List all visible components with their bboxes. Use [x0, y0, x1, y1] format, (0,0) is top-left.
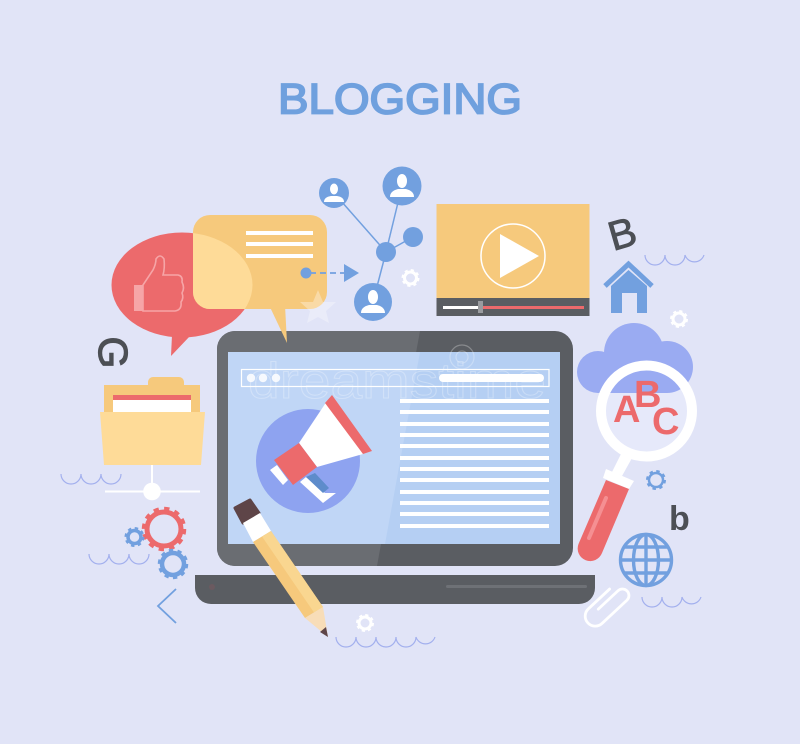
watermark: dreamstime: [248, 353, 546, 409]
letters ABC: [613, 374, 679, 443]
waves lower left: [89, 554, 149, 564]
title: BLOGGING: [278, 76, 522, 124]
megaphone: [256, 395, 372, 513]
icon: red gear: [144, 509, 184, 549]
laptop: [195, 331, 595, 604]
infographic: blogging: [60, 82, 704, 648]
icon: user node left: [319, 178, 349, 208]
letters ABC: A: [613, 389, 640, 431]
laptop screen: [228, 352, 560, 544]
icon: user node bottom: [354, 283, 392, 321]
icon: blue gear right: [647, 471, 665, 489]
network diagram: [319, 166, 423, 321]
folder connector: [105, 465, 200, 500]
icon: white gear top: [402, 270, 418, 286]
icon: blue gear: [160, 550, 186, 578]
text lines: [400, 399, 549, 528]
letter G: G: [90, 337, 136, 368]
progress slider: [443, 301, 584, 313]
letter B: B: [603, 208, 642, 260]
waves bottom right: [642, 597, 701, 607]
bubble text lines: [246, 231, 313, 258]
play button: [481, 224, 545, 288]
letter b: b: [669, 500, 690, 538]
letters ABC: C: [652, 401, 679, 443]
icon: small blue gear: [126, 528, 143, 546]
laptop base: [195, 575, 595, 604]
waves left: [61, 474, 121, 484]
magnifier ring: [601, 366, 692, 456]
waves top right: [645, 255, 704, 265]
icon: paper clip: [581, 581, 632, 630]
icon: star: [300, 290, 336, 323]
folder: [100, 377, 205, 465]
icon: white gear bottom: [357, 615, 373, 631]
icon: chevron: [158, 589, 176, 623]
laptop lid: [217, 331, 573, 566]
icon: cloud: [577, 323, 693, 393]
magnifier: [578, 366, 692, 561]
dashed arrow: [300, 264, 359, 282]
pencil: [235, 500, 328, 637]
browser bar: [242, 370, 549, 386]
magnifier lens background: [600, 365, 692, 457]
video player: [436, 204, 590, 316]
waves bottom centre: [336, 637, 435, 647]
red speech bubble: [112, 232, 252, 356]
icon: white gear right: [671, 311, 687, 327]
magnifier handle: [578, 480, 629, 561]
icon: thumbs up: [134, 256, 184, 311]
letters ABC: B: [634, 374, 661, 416]
magnifier neck: [612, 452, 632, 476]
icon: user node top: [382, 166, 422, 206]
icon: house: [605, 264, 652, 313]
icon: globe: [620, 534, 672, 586]
yellow speech bubble: [193, 215, 327, 343]
